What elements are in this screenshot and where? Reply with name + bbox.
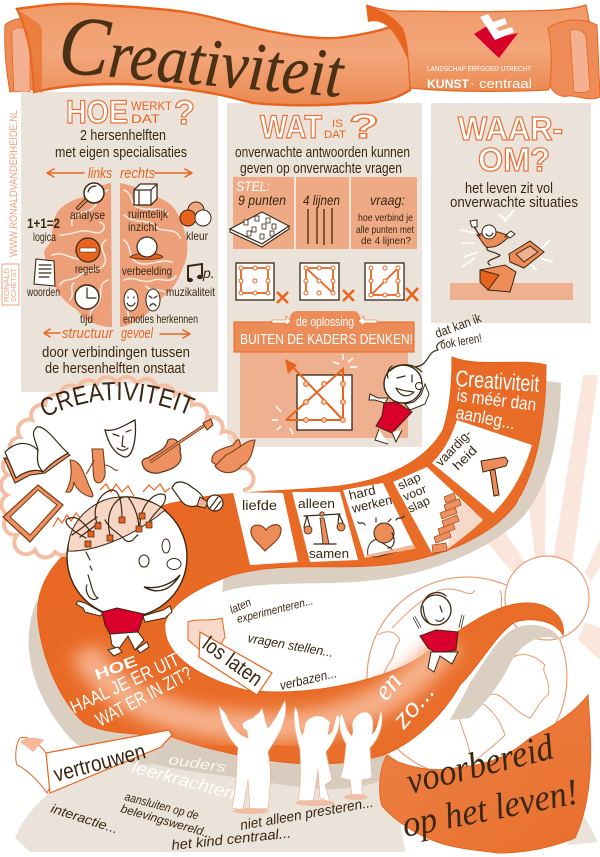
handwritten list: loose phrases: laten: [228, 597, 253, 617]
icon: clock: [75, 285, 99, 309]
handwritten list: bottom phrases: belevingswereld...: [119, 801, 214, 841]
card: alleen samen: samen: [309, 546, 349, 561]
banner: voorbereid op het leven: op het leven!: [399, 772, 581, 846]
ribbon text: en zo: [368, 666, 441, 735]
handwritten list: loose phrases: experimenteren...: [236, 595, 314, 626]
character: boy waving on globe: [414, 593, 463, 672]
speech: dat kan ik ook leren: dat kan ik: [433, 310, 484, 341]
banner: vertrouwen: vertrouwen: [51, 738, 148, 787]
label: woorden: woorden: [26, 285, 60, 299]
handwritten list: bottom phrases: aansluiten op de: [123, 789, 201, 823]
arrows: structuur gevoel: gevoel: [121, 325, 153, 342]
arrows: links rechts: rechts: [120, 165, 155, 182]
conclusion text: de hersenhelften onstaat: [45, 360, 186, 377]
title banner: [5, 0, 411, 116]
ribbon text: hoe haal je er uit: WAT ER IN ZIT?: [92, 663, 196, 731]
panel: puzzle statement: de 4 lijnen?: [361, 235, 411, 247]
cloud: creativiteit: [0, 375, 256, 560]
shadow: ribbon left: [29, 600, 170, 765]
speech: dat kan ik ook leren: ook leren!: [439, 331, 483, 352]
icon: thinking figure: [358, 516, 416, 558]
icon: ballet shoes: [66, 449, 118, 497]
arrows: links rechts: links: [88, 165, 112, 182]
card: hard werken: werken: [349, 492, 394, 516]
heading: hoe werkt dat: DAT: [131, 112, 161, 126]
icon: colour circles: [180, 202, 211, 226]
panel: waarom: [431, 103, 591, 323]
icon: picture frame: [3, 485, 63, 542]
label: analyse: analyse: [70, 208, 105, 222]
flag text: creativiteit is meer dan aanleg: aanleg...: [454, 402, 517, 433]
handwritten list: loose phrases: verbazen...: [278, 665, 338, 693]
title text: Creativiteit: [55, 0, 349, 116]
heading: wat is dat: WAT: [260, 109, 322, 145]
flag text: creativiteit is meer dan aanleg: [454, 365, 541, 433]
website credit: RONALD: [4, 268, 11, 302]
heading: wat is dat: ?: [349, 108, 379, 146]
heading: hoe werkt dat: HOE: [66, 94, 128, 130]
ribbon text: hoe haal je er uit: [67, 649, 196, 731]
card: slap voor slap: [393, 467, 483, 553]
heading: hoe werkt dat: ?: [174, 94, 195, 132]
card: vaardigheid: [432, 420, 532, 513]
intro text: [55, 127, 187, 161]
banner: voorbereid op het leven: [380, 695, 591, 853]
panel: puzzle statement: alle punten met: [356, 224, 414, 236]
icon: jack in the box: [460, 210, 553, 292]
heading: hoe werkt dat: [66, 94, 195, 132]
globe: [367, 577, 567, 777]
arrows: links rechts: [47, 165, 192, 182]
panel: puzzle statement: hoe verbind je: [358, 212, 413, 224]
handwritten list: bottom phrases: niet alleen presteren...: [239, 794, 374, 833]
shadow: ribbon upper right: [222, 380, 561, 592]
website credit: SCHETST: [11, 267, 18, 302]
brain: [44, 183, 187, 327]
card: slap voor slap: slap: [405, 493, 432, 516]
panel: wat is dat: [227, 103, 422, 447]
icon: paint tube: [172, 482, 223, 511]
intro text: onverwachte situaties: [450, 194, 578, 211]
label: ruimtelijk inzicht: [128, 207, 169, 234]
label: regels: regels: [75, 262, 100, 276]
sun rays: [478, 375, 600, 660]
people: parents and teachers: [219, 700, 382, 810]
card: vaardigheid: heid: [450, 443, 480, 473]
label: emoties herkennen: emoties herkennen: [123, 312, 198, 326]
label: logica: [27, 215, 60, 244]
label: verbeelding: verbeelding: [122, 264, 172, 278]
intro text: geven op onverwachte vragen: [240, 160, 402, 177]
icon: heart: [251, 525, 281, 551]
ribbon text: en zo: en: [368, 666, 408, 706]
icon: faces: [124, 289, 160, 311]
character: boy pointing: [369, 340, 444, 444]
ribbon text: hoe haal je er uit: HAAL JE ER UIT: [67, 649, 183, 719]
handwritten list: bottom phrases: [49, 789, 374, 853]
intro text: met eigen specialisaties: [55, 144, 187, 161]
website credit: WWW.RONALDVANDERHEIDE.NL: [8, 110, 20, 257]
banner: los laten: [188, 618, 272, 695]
card: slap voor slap: slap: [395, 470, 423, 493]
heading: wat is dat: DAT: [324, 129, 346, 141]
label: logica: logica: [33, 230, 56, 244]
heading: hoe werkt dat: WERKT: [131, 99, 173, 113]
conclusion text: door verbindingen tussen: [42, 344, 190, 361]
ribbon highlight: [85, 640, 450, 728]
speech: dat kan ik ook leren: [433, 310, 484, 352]
card: alleen samen: alleen: [298, 496, 335, 511]
continents: [378, 589, 549, 765]
website credit: [2, 110, 20, 305]
intro text: 2 hersenhelften: [80, 127, 166, 144]
heading: wat is dat: IS: [332, 118, 343, 130]
labels: ouders leerkrachten: leerkrachten: [130, 758, 237, 803]
handwritten list: loose phrases: vragen stellen...: [246, 630, 335, 660]
character: body with red shirt: [76, 601, 172, 656]
flag text: creativiteit is meer dan aanleg: is méér dan: [456, 385, 537, 415]
logo banner: [366, 5, 600, 99]
arrows: structuur gevoel: structuur: [62, 325, 114, 342]
banner: voorbereid op het leven: voorbereid: [402, 727, 558, 803]
arrows: structuur gevoel: [44, 325, 190, 342]
icon: music notes: p.: [202, 265, 215, 281]
solution box: de oplossing: [296, 314, 354, 329]
heading: wat is dat: [260, 108, 379, 146]
icon: magnifier: [78, 183, 104, 208]
panel: hoe werkt dat: [21, 92, 218, 392]
main ribbon: [38, 357, 563, 764]
icon: paper: [34, 259, 55, 286]
label: muzikaliteit: muzikaliteit: [166, 285, 216, 299]
wrong attempt 2: [300, 263, 354, 301]
icon: logo: [474, 14, 518, 58]
card: slap voor slap: voor: [401, 482, 428, 504]
label: logica: 1+1=2: [27, 215, 60, 231]
panel: puzzle statement: vraag:: [370, 192, 405, 208]
conclusion text: [42, 344, 190, 377]
heading: waarom: [458, 110, 563, 178]
panel: puzzle statement: [230, 177, 417, 249]
card: vaardigheid: vaardig-: [432, 426, 474, 469]
figure shadow: [233, 794, 368, 814]
label: tijd: tijd: [80, 312, 93, 326]
heading: waarom: WAAR-: [458, 110, 563, 147]
icon: open book: [4, 427, 70, 483]
icon: clogs: [212, 440, 255, 473]
icon: stacked planks: [432, 493, 461, 553]
shadow: ground: [15, 738, 598, 852]
intro text: het leven zit vol: [465, 180, 553, 197]
card: liefde: [233, 492, 298, 565]
sun: [505, 556, 589, 640]
band: [450, 283, 573, 300]
logo text: LANDSCHAP ERFGOED UTRECHT: [427, 64, 531, 73]
label: ruimtelijk inzicht: ruimtelijk: [128, 207, 169, 221]
intro text: [450, 180, 578, 211]
intro text: [235, 144, 410, 177]
ribbon text: hoe haal je er uit: HOE: [93, 653, 140, 684]
panel: puzzle statement: STEL:: [236, 178, 270, 194]
intro text: onverwachte antwoorden kunnen: [235, 144, 410, 161]
icon: pin board: [230, 212, 289, 247]
logo text: · centraal: [470, 76, 532, 91]
logo text: [427, 64, 532, 91]
icon: hammer: [481, 457, 508, 496]
solution box: BUITEN DE KADERS DENKEN!: [240, 332, 413, 348]
label: ruimtelijk inzicht: inzicht: [128, 220, 158, 234]
card: hard werken: hard: [347, 482, 377, 503]
panel: puzzle statement: 9 punten: [238, 192, 286, 208]
icon: four lines: [308, 208, 332, 245]
ribbon text: en zo: zo...: [386, 678, 441, 735]
label: kleur: kleur: [186, 229, 208, 243]
handwritten list: bottom phrases: interactie...: [49, 801, 120, 836]
wrong attempt 1: [236, 263, 288, 303]
solution diagram: [272, 354, 357, 434]
handwritten list: bottom phrases: het kind centraal...: [171, 825, 292, 853]
banner: vertrouwen: [16, 730, 172, 793]
icon: music notes: [187, 264, 215, 282]
card: alleen samen: [292, 492, 358, 562]
icon: theatre mask: [105, 420, 135, 457]
face: [86, 539, 181, 599]
handwritten list: loose phrases: [228, 595, 338, 693]
card: hard werken: [343, 482, 416, 558]
icon: scales: [304, 512, 345, 544]
brain wires: [66, 490, 165, 547]
cloud: creativiteit: CREATIVITEIT: [41, 382, 196, 416]
card: liefde: liefde: [242, 497, 277, 513]
shadow: ribbon on globe: [450, 625, 561, 720]
icon: cube: [134, 184, 157, 205]
heading: waarom: OM?: [478, 141, 550, 178]
icon: stop sign: [76, 238, 100, 262]
wrong attempt 3: [365, 263, 418, 301]
logo text: KUNST: [427, 77, 470, 91]
flag text: creativiteit is meer dan aanleg: Creativiteit: [455, 365, 541, 397]
labels: ouders leerkrachten: ouders: [168, 751, 227, 775]
character: head with open brain: [53, 484, 187, 617]
solution box: [234, 311, 414, 438]
panel: puzzle statement: 4 lijnen: [303, 192, 340, 208]
icon: crystal ball: [130, 237, 163, 259]
banner: los laten: los laten: [198, 632, 267, 691]
icon: violin: [142, 419, 213, 473]
